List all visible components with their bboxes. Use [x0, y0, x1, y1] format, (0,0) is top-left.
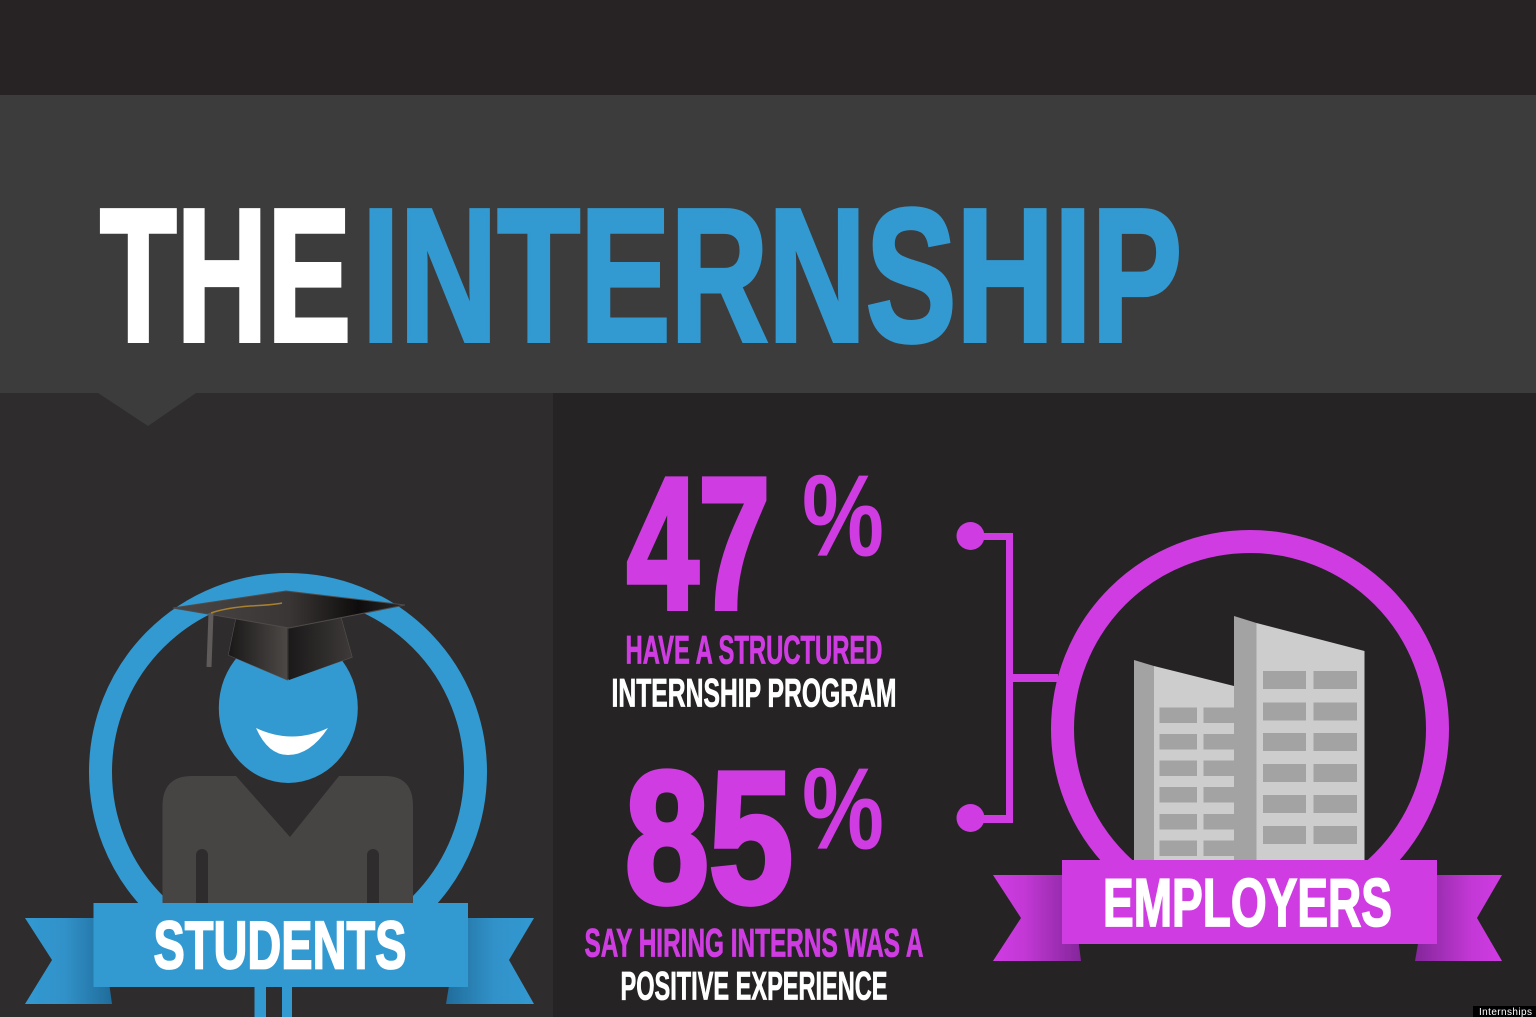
stat: 85 percent: 85 [625, 733, 793, 942]
stat: 85 percent [584, 733, 924, 1009]
connector legs [254, 987, 292, 1017]
purple ribbon front [1062, 860, 1437, 944]
title: THE [100, 170, 351, 382]
top strip [0, 0, 1536, 95]
students label: STUDENTS [154, 908, 406, 983]
bracket connector [956, 522, 1058, 832]
smile [256, 728, 328, 755]
right arm slit [367, 849, 379, 903]
student body [162, 776, 413, 903]
title band [0, 95, 1536, 393]
panel: students background [0, 393, 553, 1017]
employers label: EMPLOYERS [1103, 866, 1392, 941]
blue ribbon tails [25, 918, 534, 1004]
panel: employers background [553, 393, 1536, 1017]
stat: 47 percent: HAVE A STRUCTURED [626, 629, 882, 673]
purple ribbon tails [993, 875, 1502, 961]
stat: 47 percent: INTERNSHIP PROGRAM [612, 672, 896, 716]
icon: office buildings [1134, 616, 1364, 860]
title: INTERNSHIP [362, 170, 1182, 382]
left arm slit [196, 849, 208, 903]
icon: graduation cap [173, 591, 405, 680]
title [100, 170, 1182, 382]
pointer below title band [98, 393, 196, 426]
blue ring [100, 584, 476, 960]
panel: students figure [25, 584, 534, 1017]
stat: 85 percent: SAY HIRING INTERNS WAS A [584, 922, 924, 966]
purple ring [1062, 542, 1438, 916]
stat: 47 percent [612, 439, 896, 716]
student head [219, 633, 358, 783]
stat: 85 percent: % [802, 744, 884, 874]
stat: 85 percent: POSITIVE EXPERIENCE [620, 965, 888, 1009]
stat: 47 percent: % [802, 450, 884, 580]
stat: 47 percent: 47 [627, 439, 770, 648]
panel: employers figure [993, 542, 1502, 961]
blue ribbon front [94, 903, 468, 987]
